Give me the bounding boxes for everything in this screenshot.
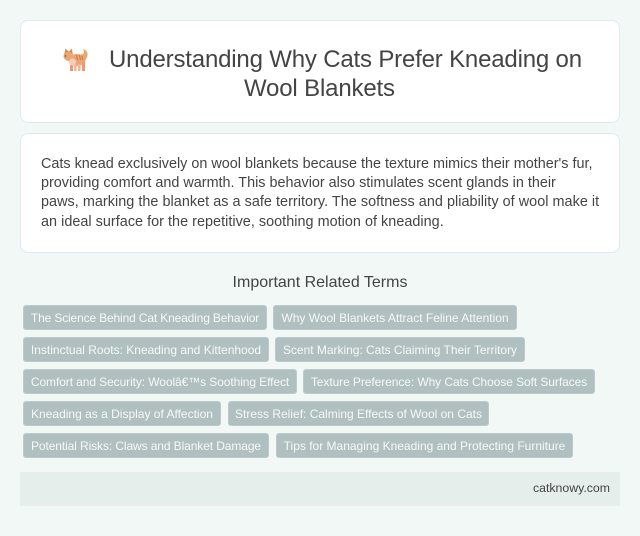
text: description: an ideal surface for the repetitive, soothing motion of kneading. bbox=[41, 214, 444, 230]
panel: title card bbox=[20, 20, 620, 123]
heading: related terms: Important Related Terms bbox=[233, 274, 407, 291]
title: Understanding Why Cats Prefer Kneading on bbox=[109, 46, 582, 72]
tag bbox=[23, 337, 269, 362]
text: description bbox=[41, 156, 600, 230]
tag: The Science Behind Cat Kneading Behavior bbox=[31, 311, 259, 325]
tag list bbox=[23, 305, 595, 458]
tag bbox=[23, 369, 297, 394]
tag bbox=[228, 401, 489, 426]
tag bbox=[23, 401, 221, 426]
tag bbox=[23, 305, 267, 330]
text: description: Cats knead exclusively on wool blankets because the texture mimics their mother's fur, bbox=[41, 156, 592, 172]
footer text: catknowy.com bbox=[533, 481, 610, 495]
tag: Scent Marking: Cats Claiming Their Territory bbox=[283, 343, 517, 357]
tag: Comfort and Security: Woolâ€™s Soothing Effect bbox=[31, 375, 289, 389]
tag: Why Wool Blankets Attract Feline Attention bbox=[281, 311, 509, 325]
tag bbox=[23, 433, 269, 458]
tag: Kneading as a Display of Affection bbox=[31, 407, 213, 421]
tag: Stress Relief: Calming Effects of Wool on Cats bbox=[235, 407, 482, 421]
tag bbox=[303, 369, 595, 394]
tag: Tips for Managing Kneading and Protecting Furniture bbox=[284, 439, 565, 453]
panel: description card bbox=[20, 133, 620, 253]
tag bbox=[276, 433, 573, 458]
tag: Texture Preference: Why Cats Choose Soft Surfaces bbox=[311, 375, 587, 389]
tag bbox=[273, 305, 517, 330]
footer bbox=[20, 472, 620, 506]
icon: cat bbox=[64, 48, 88, 71]
title bbox=[109, 46, 582, 102]
tag: Instinctual Roots: Kneading and Kittenhood bbox=[31, 343, 261, 357]
title: Wool Blankets bbox=[244, 74, 395, 102]
tag bbox=[275, 337, 525, 362]
text: description: paws, marking the blanket as a safe territory. The softness and pliability of wool make it bbox=[41, 194, 599, 210]
tag: Potential Risks: Claws and Blanket Damage bbox=[31, 439, 261, 453]
text: description: providing comfort and warmth. This behavior also stimulates scent glands in their bbox=[41, 175, 556, 191]
